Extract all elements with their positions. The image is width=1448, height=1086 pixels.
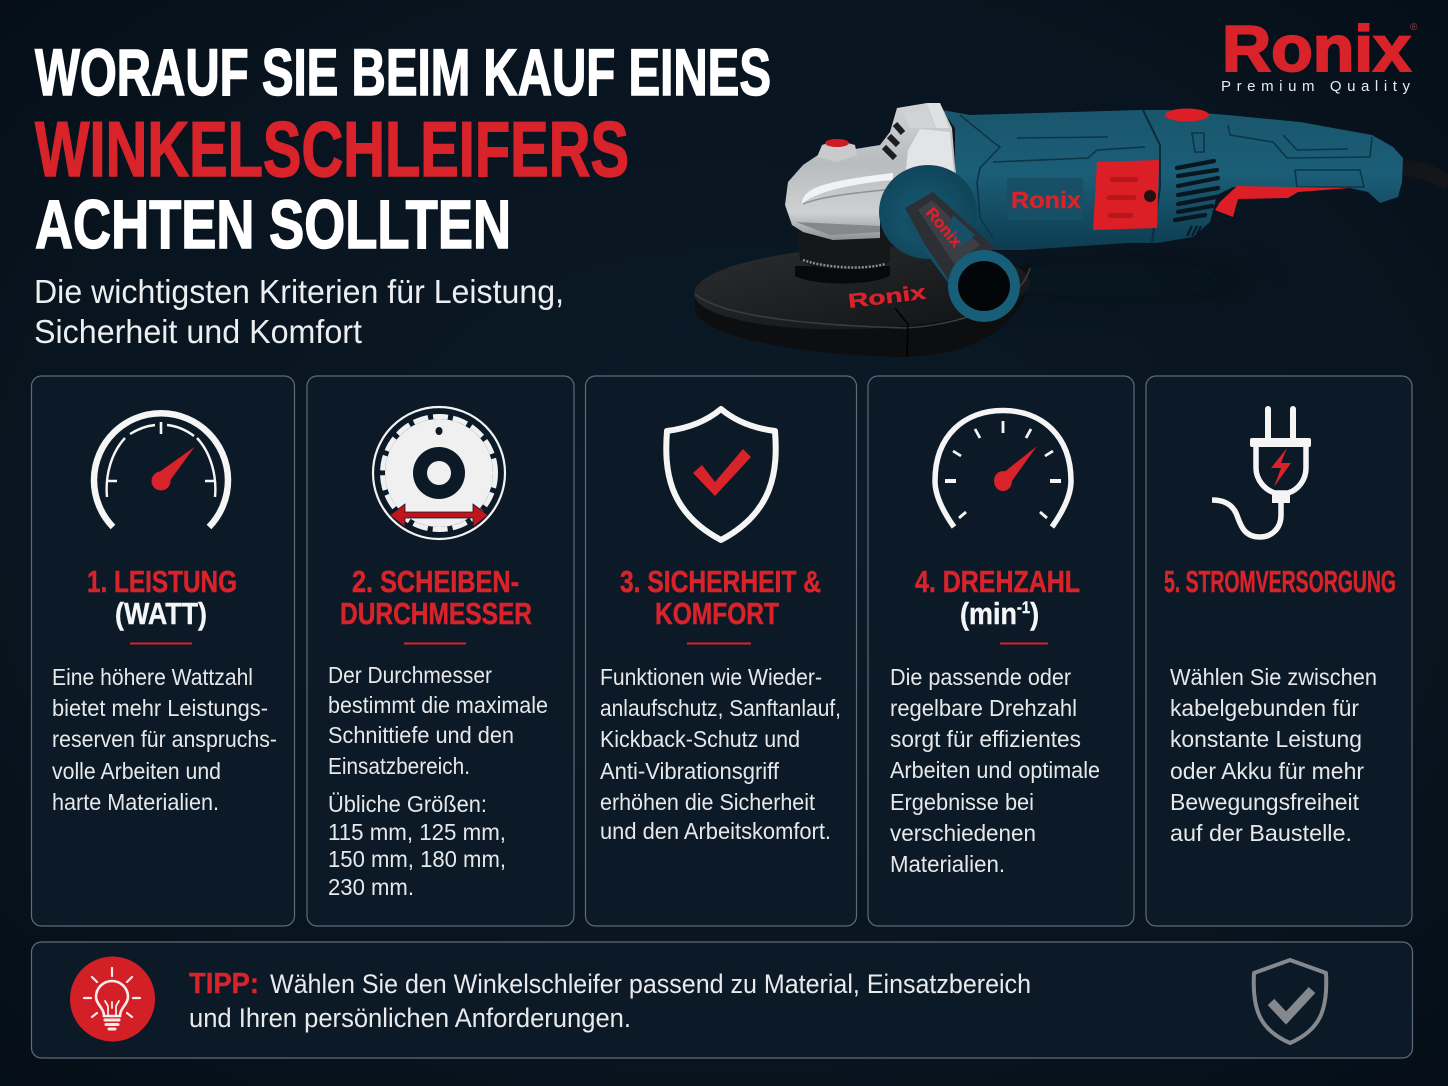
text: Der Durchmesser [328, 662, 492, 688]
text: volle Arbeiten und [52, 758, 221, 784]
heading: KOMFORT [655, 596, 779, 631]
power cable [1400, 167, 1448, 184]
title: WORAUF SIE BEIM KAUF EINES [35, 35, 771, 109]
accent rule [130, 642, 192, 644]
heading [87, 564, 237, 631]
text: 230 mm. [328, 874, 414, 900]
logo: Ronix: ® [1410, 22, 1418, 33]
accent rule [1000, 642, 1048, 644]
text: Eine höhere Wattzahl [52, 664, 253, 690]
title [35, 35, 771, 263]
accent rule [404, 642, 466, 644]
icon: saw blade [373, 407, 505, 539]
panel: tip [32, 942, 1412, 1058]
heading: (min [960, 597, 1017, 631]
text: 150 mm, 180 mm, [328, 846, 506, 872]
side handle: Ronix [922, 205, 965, 251]
text: oder Akku für mehr [1170, 758, 1364, 784]
logo: Ronix: Premium Quality [1221, 78, 1410, 95]
text: regelbare Drehzahl [890, 695, 1077, 721]
panel: Leistung [32, 376, 294, 926]
subtitle: Sicherheit und Komfort [34, 313, 362, 350]
side handle [879, 165, 1020, 322]
heading: -1 [1017, 599, 1030, 617]
text: Bewegungsfreiheit [1170, 789, 1360, 815]
heading: 2. SCHEIBEN- [352, 564, 519, 599]
text: reserven für anspruchs- [52, 726, 277, 752]
text: kabelgebunden für [1170, 695, 1359, 721]
text: konstante Leistung [1170, 726, 1362, 752]
red panel [1093, 160, 1159, 230]
text: harte Materialien. [52, 789, 219, 815]
text [1170, 664, 1377, 846]
subtitle: Die wichtigsten Kriterien für Leistung, [34, 273, 564, 310]
brand badge [1007, 178, 1083, 220]
collar [795, 232, 890, 284]
text: Wählen Sie zwischen [1170, 664, 1377, 690]
icon: power gauge [94, 413, 228, 527]
red trigger [1215, 186, 1350, 217]
heading [340, 564, 532, 631]
illustration: angle grinder [693, 103, 1448, 357]
text: Kickback-Schutz und [600, 726, 800, 752]
text: Schnittiefe und den [328, 722, 514, 748]
body contour lines [960, 110, 1372, 242]
icon: shield with check [666, 409, 776, 540]
text: Anti-Vibrationsgriff [600, 758, 780, 784]
heading [620, 564, 821, 631]
guard disc [693, 241, 1031, 357]
text: Funktionen wie Wieder- [600, 664, 822, 690]
title: ACHTEN SOLLTEN [35, 186, 511, 263]
text: Materialien. [890, 851, 1005, 877]
tip text [189, 968, 1031, 1033]
heading: ) [1030, 597, 1039, 631]
text [890, 664, 1100, 877]
heading: (WATT) [115, 596, 207, 631]
text: Die passende oder [890, 664, 1071, 690]
text: Einsatzbereich. [328, 753, 470, 779]
panel: Sicherheit und Komfort [586, 376, 856, 926]
text: Ergebnisse bei [890, 789, 1034, 815]
heading: 1. LEISTUNG [87, 564, 237, 599]
panel: Scheibendurchmesser [307, 376, 574, 926]
tip text: Wählen Sie den Winkelschleifer passend zu Material, Einsatzbereich [270, 969, 1031, 999]
tip text: und Ihren persönlichen Anforderungen. [189, 1003, 631, 1033]
text: 115 mm, 125 mm, [328, 819, 506, 845]
icon: power plug [1212, 409, 1311, 537]
text [328, 662, 548, 900]
logo: Ronix: Ronix [1222, 12, 1411, 85]
motor body [942, 110, 1403, 250]
heading: 4. DREHZAHL [915, 564, 1080, 599]
text: sorgt für effizientes [890, 726, 1081, 752]
icon: light bulb [70, 956, 155, 1042]
text [600, 664, 841, 844]
icon: grey shield [1254, 960, 1326, 1043]
tip text: TIPP: [189, 968, 259, 1000]
text: anlaufschutz, Sanftanlauf, [600, 695, 841, 721]
text: Übliche Größen: [328, 791, 487, 817]
text: auf der Baustelle. [1170, 820, 1352, 846]
text: bietet mehr Leistungs- [52, 695, 268, 721]
knob [817, 140, 857, 162]
text: erhöhen die Sicherheit [600, 789, 816, 815]
brand badge: Ronix [1011, 187, 1081, 213]
panel: Stromversorgung [1146, 376, 1412, 926]
red switch [1165, 108, 1209, 122]
accent rule [687, 642, 751, 644]
text: und den Arbeitskomfort. [600, 818, 831, 844]
text [52, 664, 277, 815]
heading: DURCHMESSER [340, 596, 532, 631]
icon: speedometer [935, 410, 1071, 527]
silver gear housing [785, 103, 957, 240]
heading [915, 564, 1080, 631]
panel: Drehzahl [868, 376, 1134, 926]
text: bestimmt die maximale [328, 692, 548, 718]
subtitle [34, 273, 564, 350]
vents [1175, 161, 1218, 236]
title: WINKELSCHLEIFERS [35, 105, 629, 193]
text: Arbeiten und optimale [890, 757, 1100, 783]
guard disc: Ronix [847, 282, 927, 313]
heading: 3. SICHERHEIT & [620, 564, 821, 599]
text: verschiedenen [890, 820, 1036, 846]
